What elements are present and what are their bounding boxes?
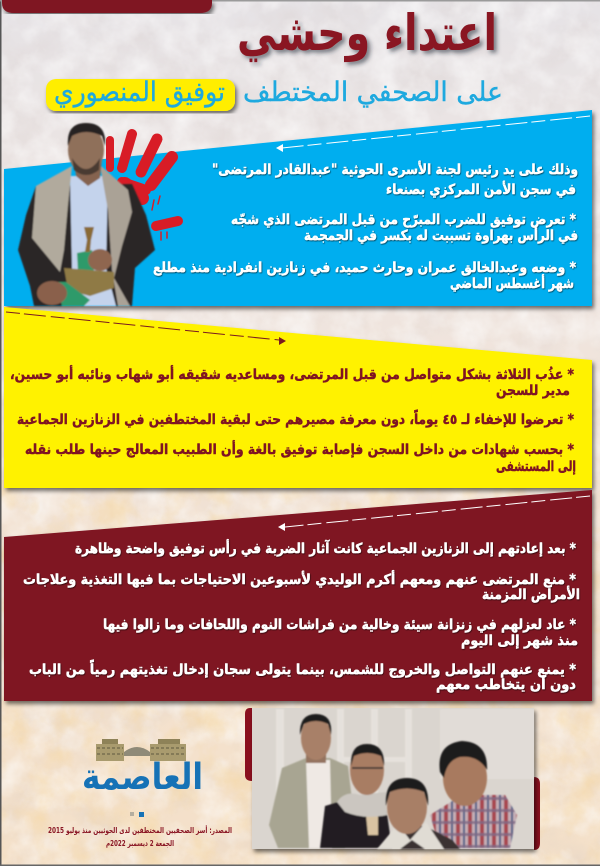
green sheath	[77, 250, 94, 272]
panel: maroon	[4, 490, 592, 701]
logo buildings	[96, 739, 186, 761]
source note	[48, 825, 232, 848]
text: blue panel lines: في سجن الأمن المركزي بصنعاء	[386, 181, 576, 199]
text: maroon panel lines: دون أن يتخاطب معهم	[436, 675, 576, 693]
belt	[64, 268, 114, 296]
text: maroon panel lines: منذ شهر إلى اليوم	[461, 633, 578, 649]
lower hand	[37, 281, 67, 305]
man 2	[320, 744, 392, 848]
subtitle: على الصحفي المختطف	[243, 77, 503, 108]
icon: red hand print	[110, 134, 178, 240]
title: اعتداء وحشي	[237, 4, 497, 63]
green cloth	[56, 282, 90, 306]
logo wordmark: العاصمة	[82, 757, 203, 798]
maroon tabs	[245, 708, 252, 781]
man 1	[269, 714, 352, 848]
man 3	[377, 778, 460, 849]
arrow: maroon dashed	[6, 312, 286, 345]
text: yellow panel lines: إلى المستشفى	[496, 459, 576, 475]
shirt	[70, 176, 116, 306]
neck	[74, 160, 102, 186]
logo: Al-Asima	[82, 739, 203, 817]
arrow: white dashed	[276, 116, 590, 152]
window backdrop	[276, 709, 534, 809]
text: maroon panel lines	[23, 539, 580, 693]
beard	[72, 158, 100, 175]
text: maroon panel lines: الأمراض المزمنة	[482, 586, 580, 603]
hair	[68, 123, 105, 146]
photo panel: four journalists	[245, 708, 540, 850]
top maroon tab	[2, 0, 212, 13]
head	[68, 126, 104, 174]
text: blue panel lines	[153, 161, 578, 292]
text: yellow panel lines: * تعرضوا للإخفاء لـ ٤٥ يوماً، دون معرفة مصيرهم حتى لبقية المختطفين في الزنازين الجماعية	[17, 409, 575, 428]
panel: blue	[4, 110, 592, 306]
shawl left	[32, 166, 72, 272]
arrow: white dashed	[278, 496, 590, 531]
logo squares	[130, 812, 144, 817]
panel: yellow	[4, 307, 592, 488]
shawl right	[100, 165, 132, 306]
text: yellow panel lines	[10, 365, 576, 475]
source note: الجمعة 2 ديسمبر 2022م	[106, 839, 174, 848]
man 4	[430, 741, 517, 848]
text: yellow panel lines: مدير للسجن	[496, 383, 570, 399]
source note: المصدر: أسر الصحفيين المختطفين لدى الحوثيين منذ يوليو 2015	[48, 825, 232, 835]
highlighted name pill: توفيق المنصوري	[54, 77, 225, 108]
jambiya hilt	[84, 227, 94, 252]
coat	[18, 184, 155, 306]
hand	[88, 249, 112, 271]
photo: man with jambiya	[18, 123, 155, 306]
